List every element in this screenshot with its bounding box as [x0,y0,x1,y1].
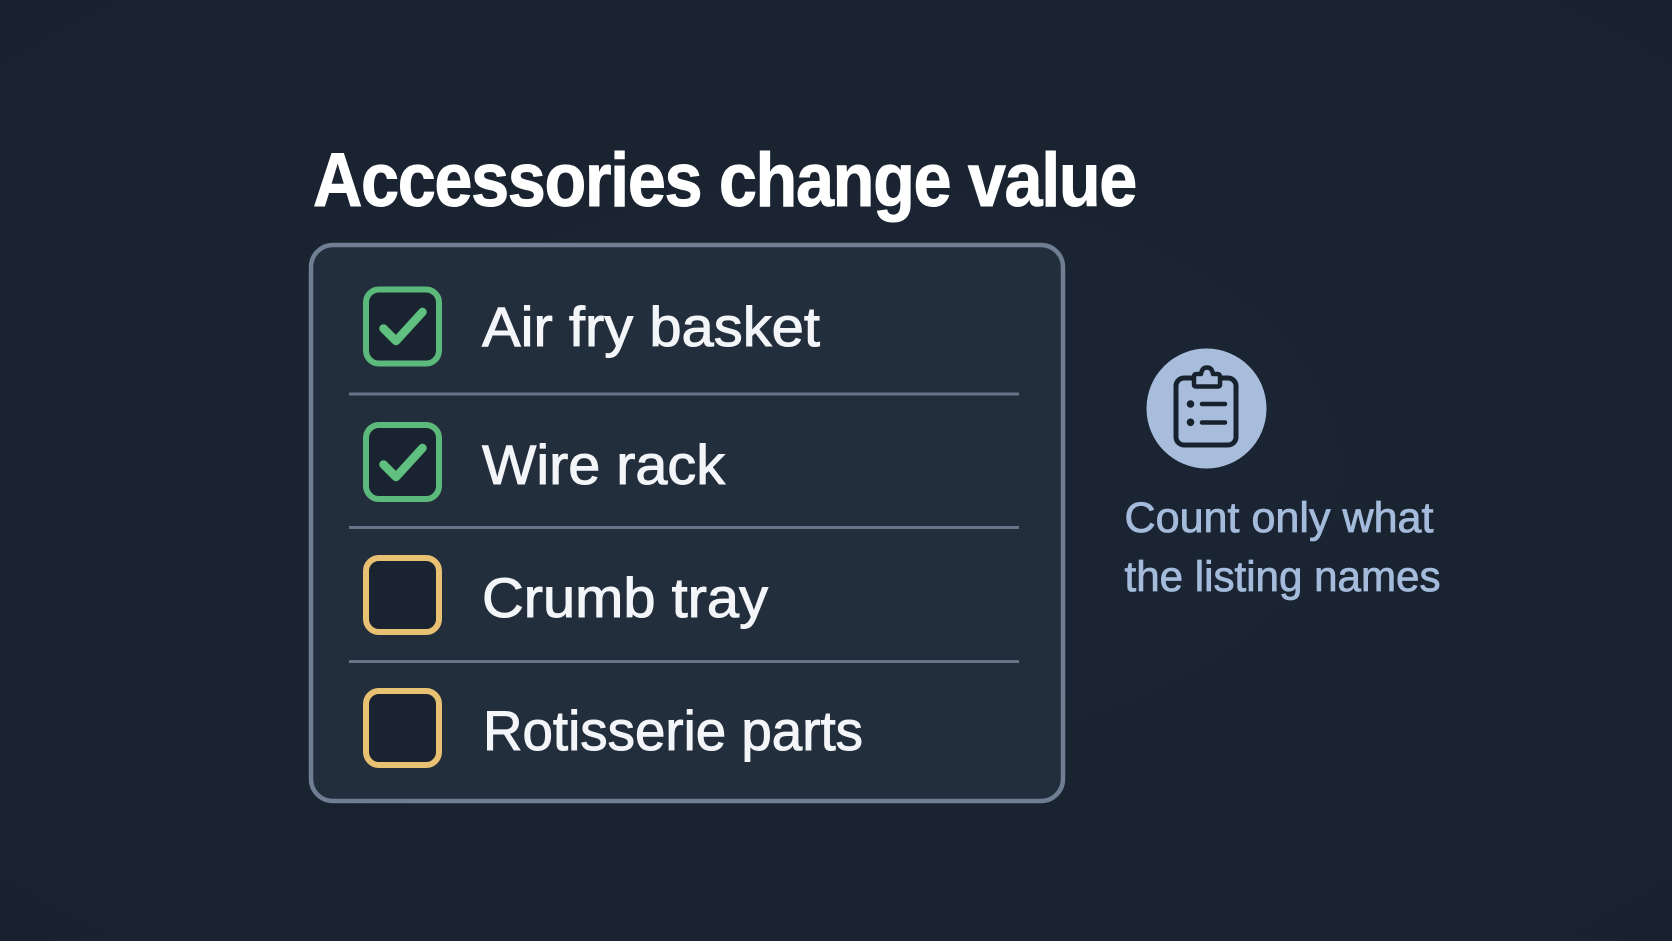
label: wire rack: Wire rack [482,433,726,496]
text: callout line two: the listing names [1124,553,1440,601]
label: rotisserie parts: Rotisserie parts [483,699,863,762]
icon: amber empty box [366,691,439,765]
callout: count only what the listing names [1124,348,1440,601]
label: air fry basket: Air fry basket [482,295,820,358]
icon: amber empty box [366,558,439,632]
icon: clipboard in circle [1146,348,1266,468]
row: wire rack [366,425,726,499]
panel background [311,245,1063,801]
text: callout line one: Count only what [1124,494,1434,542]
row: air fry basket [366,290,820,364]
row: rotisserie parts [366,691,863,765]
row: crumb tray [366,558,768,632]
title: Accessories change value [313,138,1136,223]
panel: accessories checklist [311,245,1063,801]
icon: green checked box [366,425,439,499]
icon: green checked box [366,290,439,364]
label: crumb tray: Crumb tray [482,566,768,629]
